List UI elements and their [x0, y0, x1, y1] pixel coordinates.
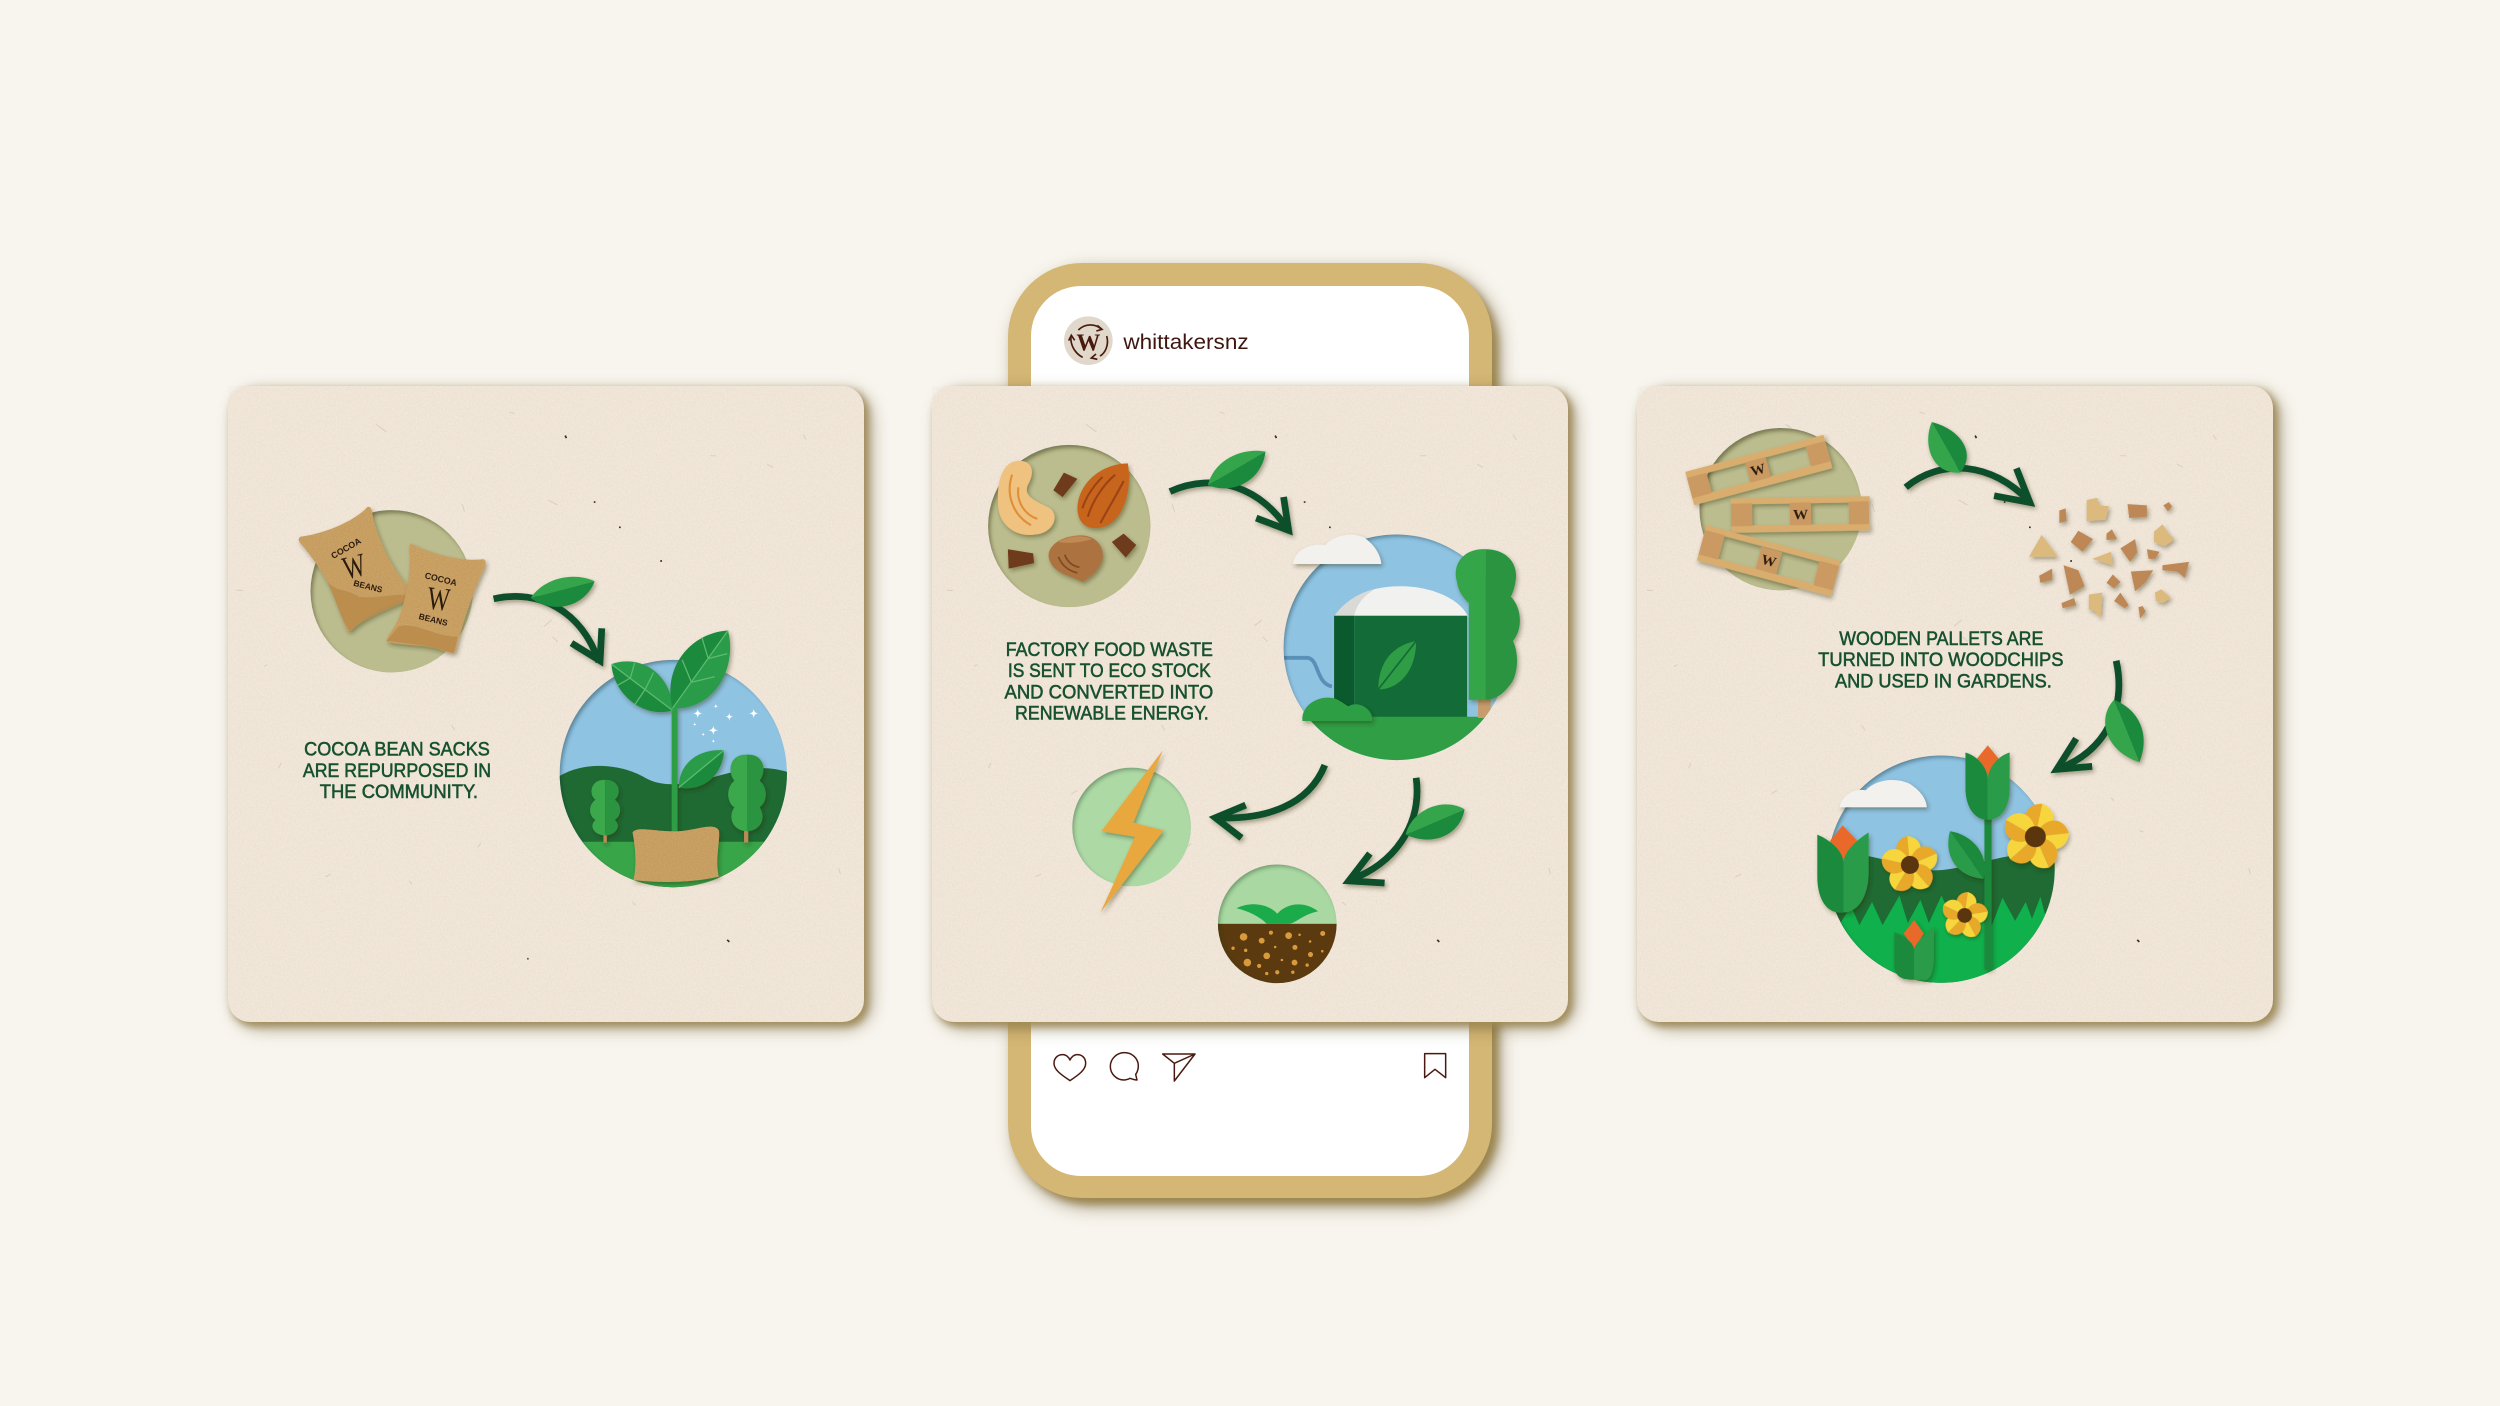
cloud — [1840, 780, 1927, 807]
seedling plant — [611, 630, 730, 832]
account name: whittakersnz — [1122, 330, 1249, 354]
circle: food waste — [987, 444, 1157, 614]
cloud — [1293, 535, 1381, 564]
caption: WOODEN PALLETS ARE — [1839, 628, 2043, 650]
caption: ARE REPURPOSED IN — [303, 760, 491, 782]
pallet middle — [1731, 496, 1870, 533]
icon: cocoa sack one: COCOA — [329, 535, 363, 561]
caption: AND CONVERTED INTO — [1005, 682, 1213, 704]
profile header — [1064, 316, 1249, 365]
icon: cocoa sack one: W — [339, 548, 370, 587]
circle: olive background — [1698, 428, 1868, 598]
circle: soil — [1218, 864, 1337, 984]
woodchips — [2029, 498, 2189, 619]
stem and leaf — [1948, 818, 1992, 969]
icon: cocoa sack one — [299, 507, 415, 631]
circle: olive background — [309, 510, 479, 680]
pallet bottom: W — [1759, 551, 1778, 571]
arrow — [494, 577, 602, 662]
logo avatar: W — [1076, 331, 1100, 357]
pallet middle: W — [1793, 506, 1808, 523]
sparkles — [693, 704, 759, 743]
logo avatar — [1064, 316, 1113, 365]
arrow — [1349, 778, 1465, 883]
pallet top: W — [1748, 460, 1767, 480]
panel: cocoa bean sacks — [228, 386, 870, 1027]
phone mockup — [1008, 263, 1500, 1207]
caption: THE COMMUNITY. — [320, 781, 478, 803]
caption — [1818, 628, 2064, 693]
panel: wooden pallets — [1637, 386, 2279, 1027]
caption: FACTORY FOOD WASTE — [1006, 639, 1213, 661]
caption: IS SENT TO ECO STOCK — [1008, 660, 1211, 682]
tulip left — [1817, 825, 1869, 913]
burlap sack pot — [633, 827, 719, 882]
caption: RENEWABLE ENERGY. — [1015, 702, 1209, 724]
arrow — [1215, 765, 1325, 838]
circle: eco stock plant — [1284, 534, 1498, 760]
icon: lightning bolt — [1100, 750, 1164, 912]
icon: comment — [1110, 1053, 1138, 1080]
arrow — [2057, 661, 2144, 769]
tulip tall — [1965, 745, 2010, 820]
food scraps — [998, 461, 1136, 582]
tulip small — [1894, 920, 1934, 980]
icon: cocoa sack two: BEANS — [418, 611, 449, 628]
icon: cocoa sack two — [386, 543, 486, 654]
tree left — [590, 780, 620, 843]
circle: energy — [1072, 768, 1191, 886]
icon: cocoa sack two: COCOA — [424, 570, 459, 588]
icon: bookmark — [1425, 1054, 1446, 1078]
caption: COCOA BEAN SACKS — [304, 738, 490, 760]
icon: cocoa sack two: W — [426, 581, 452, 619]
caption — [1005, 639, 1213, 724]
action icons — [1054, 1053, 1446, 1081]
tree right — [728, 755, 766, 843]
flower small — [1936, 889, 1993, 944]
icon: heart — [1054, 1055, 1086, 1081]
flower medium — [1876, 833, 1944, 898]
tree — [1456, 549, 1520, 700]
circle: seedling landscape — [557, 659, 795, 895]
caption: AND USED IN GARDENS. — [1835, 671, 2052, 693]
arrow — [1906, 422, 2030, 502]
caption: TURNED INTO WOODCHIPS — [1818, 649, 2064, 671]
arrow — [1170, 451, 1289, 530]
panel: factory food waste — [932, 386, 1574, 1027]
bush — [1302, 698, 1372, 721]
pallet bottom — [1697, 525, 1841, 596]
storage dome — [1334, 586, 1468, 617]
tank — [1334, 616, 1354, 718]
circle: garden — [1824, 754, 2062, 991]
pallet top — [1685, 435, 1832, 505]
icon: cocoa sack one: BEANS — [353, 578, 384, 595]
flower large — [1992, 796, 2078, 879]
caption — [303, 738, 491, 803]
icon: send — [1163, 1054, 1195, 1081]
